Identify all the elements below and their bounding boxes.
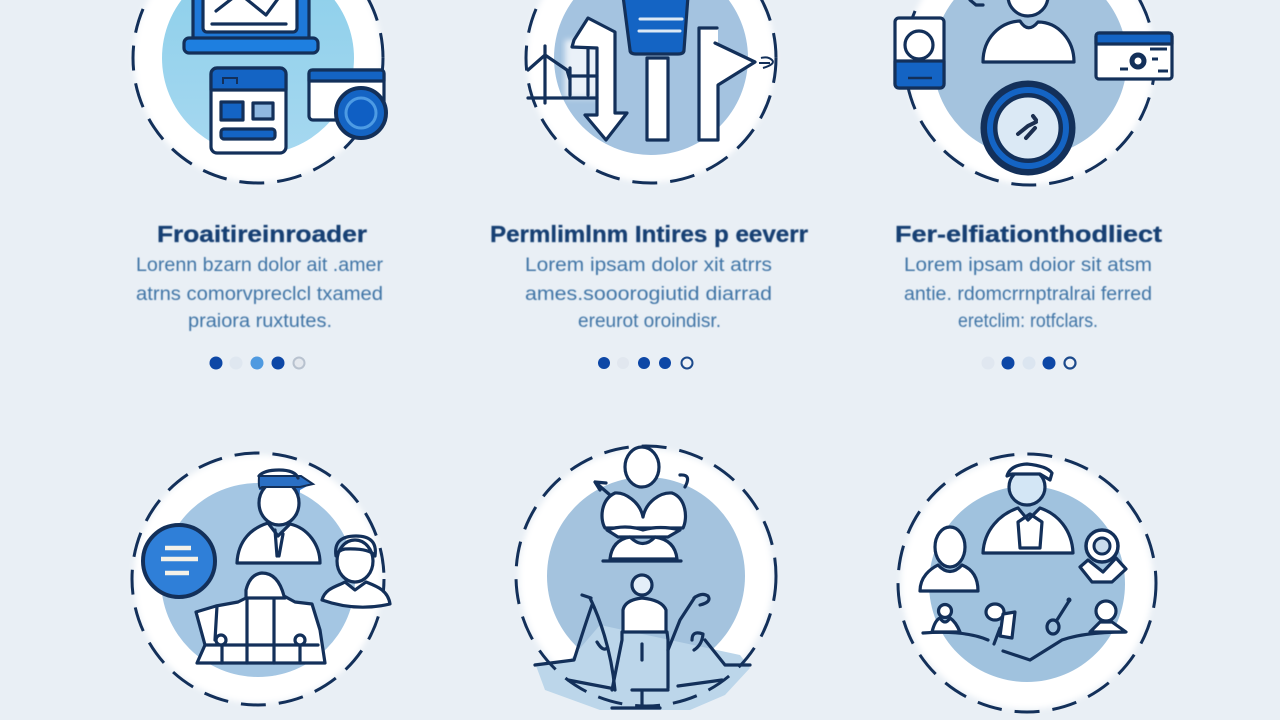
body text: praiora ruxtutes. [188, 311, 332, 332]
body text: atrns comorvpreclcl txamed [136, 284, 383, 305]
panel: feature one [133, 0, 386, 370]
icon: team, award and tools in dashed circle [898, 454, 1156, 712]
body text: antie. rdomcrrnptralrai ferred [904, 284, 1152, 305]
body text: Lorem ipsam doior sit atsm [904, 255, 1152, 276]
panel: feature six [898, 454, 1156, 712]
icon: tools and arrow in dashed circle [526, 0, 776, 183]
body text [525, 255, 772, 332]
pagination dots [210, 356, 304, 370]
heading: Fer-elfiationthodliect [895, 221, 1162, 247]
body text: Lorenn bzarn dolor ait .amer [136, 255, 384, 276]
panel: feature four [132, 453, 390, 705]
pagination dots [982, 356, 1076, 370]
panel: feature three [895, 0, 1172, 370]
heading: Permlimlnm Intires p eeverr [490, 221, 808, 247]
icon: mentor and group in dashed circle [516, 446, 776, 710]
panel: feature two [490, 0, 808, 369]
body text [136, 255, 384, 332]
body text: ereurot oroindisr. [578, 311, 721, 332]
body text: ames.sooorogiutid diarrad [525, 284, 772, 305]
body text: Lorem ipsam dolor xit atrrs [525, 255, 772, 276]
body text [904, 255, 1152, 332]
pagination dots [598, 357, 692, 369]
heading: Froaitireinroader [157, 221, 367, 247]
icon: team and machine in dashed circle [132, 453, 390, 705]
icon: laptop, window and card in dashed circle [133, 0, 386, 183]
body text: eretclim: rotfclars. [958, 311, 1098, 332]
icon: person, cards and dial in dashed circle [895, 0, 1172, 185]
panel: feature five [516, 446, 776, 710]
